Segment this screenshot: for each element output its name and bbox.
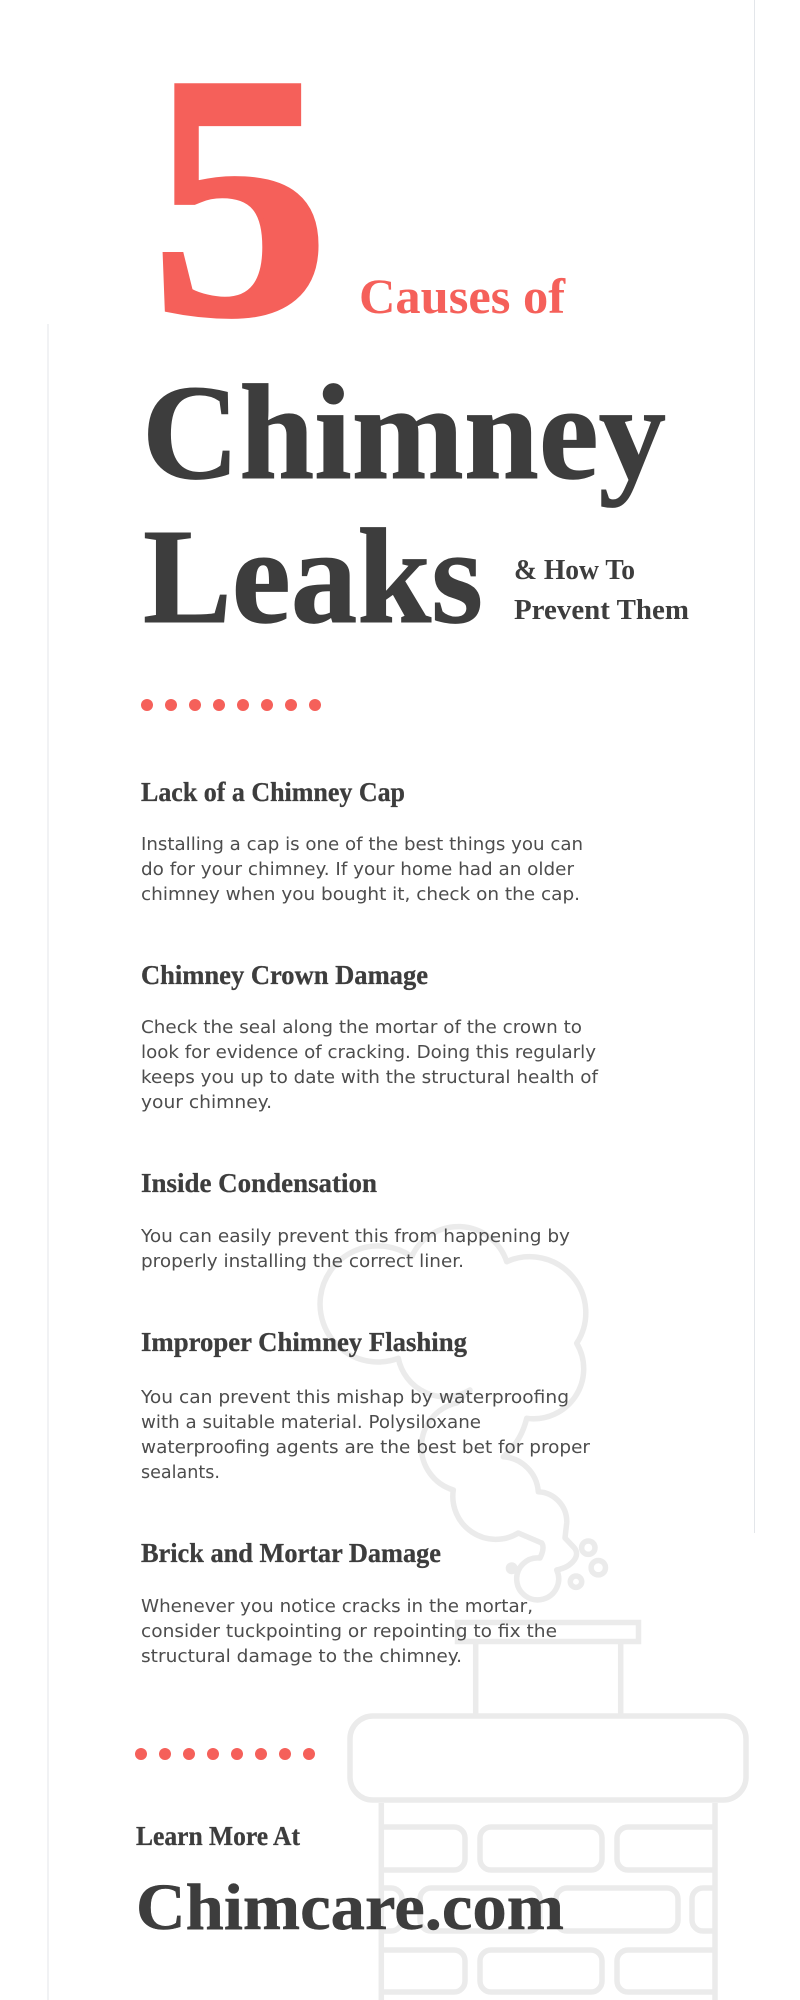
icon: smoke cloud (320, 1227, 606, 1600)
cause body: Check the seal along the mortar of the crown to (141, 1017, 582, 1038)
cause body: do for your chimney. If your home had an older (141, 859, 575, 880)
subtitle: how to prevent them: Prevent Them (514, 594, 689, 626)
cause: lack of a chimney cap (141, 777, 583, 905)
heading: leaks: Leaks (143, 502, 483, 652)
cause: brick and mortar damage (141, 1538, 557, 1667)
cause body: chimney when you bought it, check on the cap. (141, 884, 580, 905)
cause body (141, 834, 583, 905)
cause body: with a suitable material. Polysiloxane (141, 1412, 481, 1433)
cause body: You can prevent this mishap by waterproofing (140, 1387, 569, 1408)
heading: causes of: Causes of (359, 268, 566, 324)
big number five: 5 (151, 5, 329, 389)
cause body: Whenever you notice cracks in the mortar, (141, 1596, 533, 1617)
cause: improper chimney flashing (140, 1327, 591, 1483)
dotted divider: top (141, 699, 321, 711)
cause: chimney crown damage (141, 960, 599, 1113)
dotted divider: bottom (135, 1748, 315, 1760)
heading: chimney: Chimney (142, 358, 666, 508)
cause heading: Improper Chimney Flashing (141, 1327, 467, 1357)
cause body: structural damage to the chimney. (141, 1646, 462, 1667)
cause body (140, 1387, 591, 1483)
cause: inside condensation (140, 1168, 570, 1272)
cause body (141, 1596, 557, 1667)
cause body: properly installing the correct liner. (141, 1251, 464, 1272)
title (142, 5, 689, 652)
footer call to action (136, 1821, 564, 1944)
learn more label: Learn More At (136, 1821, 300, 1851)
cause heading: Inside Condensation (141, 1168, 377, 1198)
subtitle: how to prevent them: & How To (514, 554, 635, 586)
cause body: keeps you up to date with the structural health of (141, 1067, 599, 1088)
cause body: You can easily prevent this from happening by (140, 1226, 570, 1247)
cause body: sealants. (141, 1462, 220, 1483)
subtitle: how to prevent them (514, 554, 689, 626)
cause body: waterproofing agents are the best bet for proper (141, 1437, 591, 1458)
cause body (140, 1226, 570, 1272)
website name: Chimcare.com (136, 1871, 564, 1944)
cause heading: Lack of a Chimney Cap (141, 777, 405, 807)
cause body: consider tuckpointing or repointing to fix the (141, 1621, 557, 1642)
cause heading: Brick and Mortar Damage (141, 1538, 441, 1568)
cause body: Installing a cap is one of the best things you can (141, 834, 583, 855)
cause body: your chimney. (141, 1092, 272, 1113)
icon: chimney stack (347, 1620, 749, 2000)
cause heading: Chimney Crown Damage (141, 960, 428, 990)
cause body (141, 1017, 599, 1113)
cause body: look for evidence of cracking. Doing this regularly (141, 1042, 596, 1063)
icon: chimney with smoke watermark (318, 1224, 749, 2000)
